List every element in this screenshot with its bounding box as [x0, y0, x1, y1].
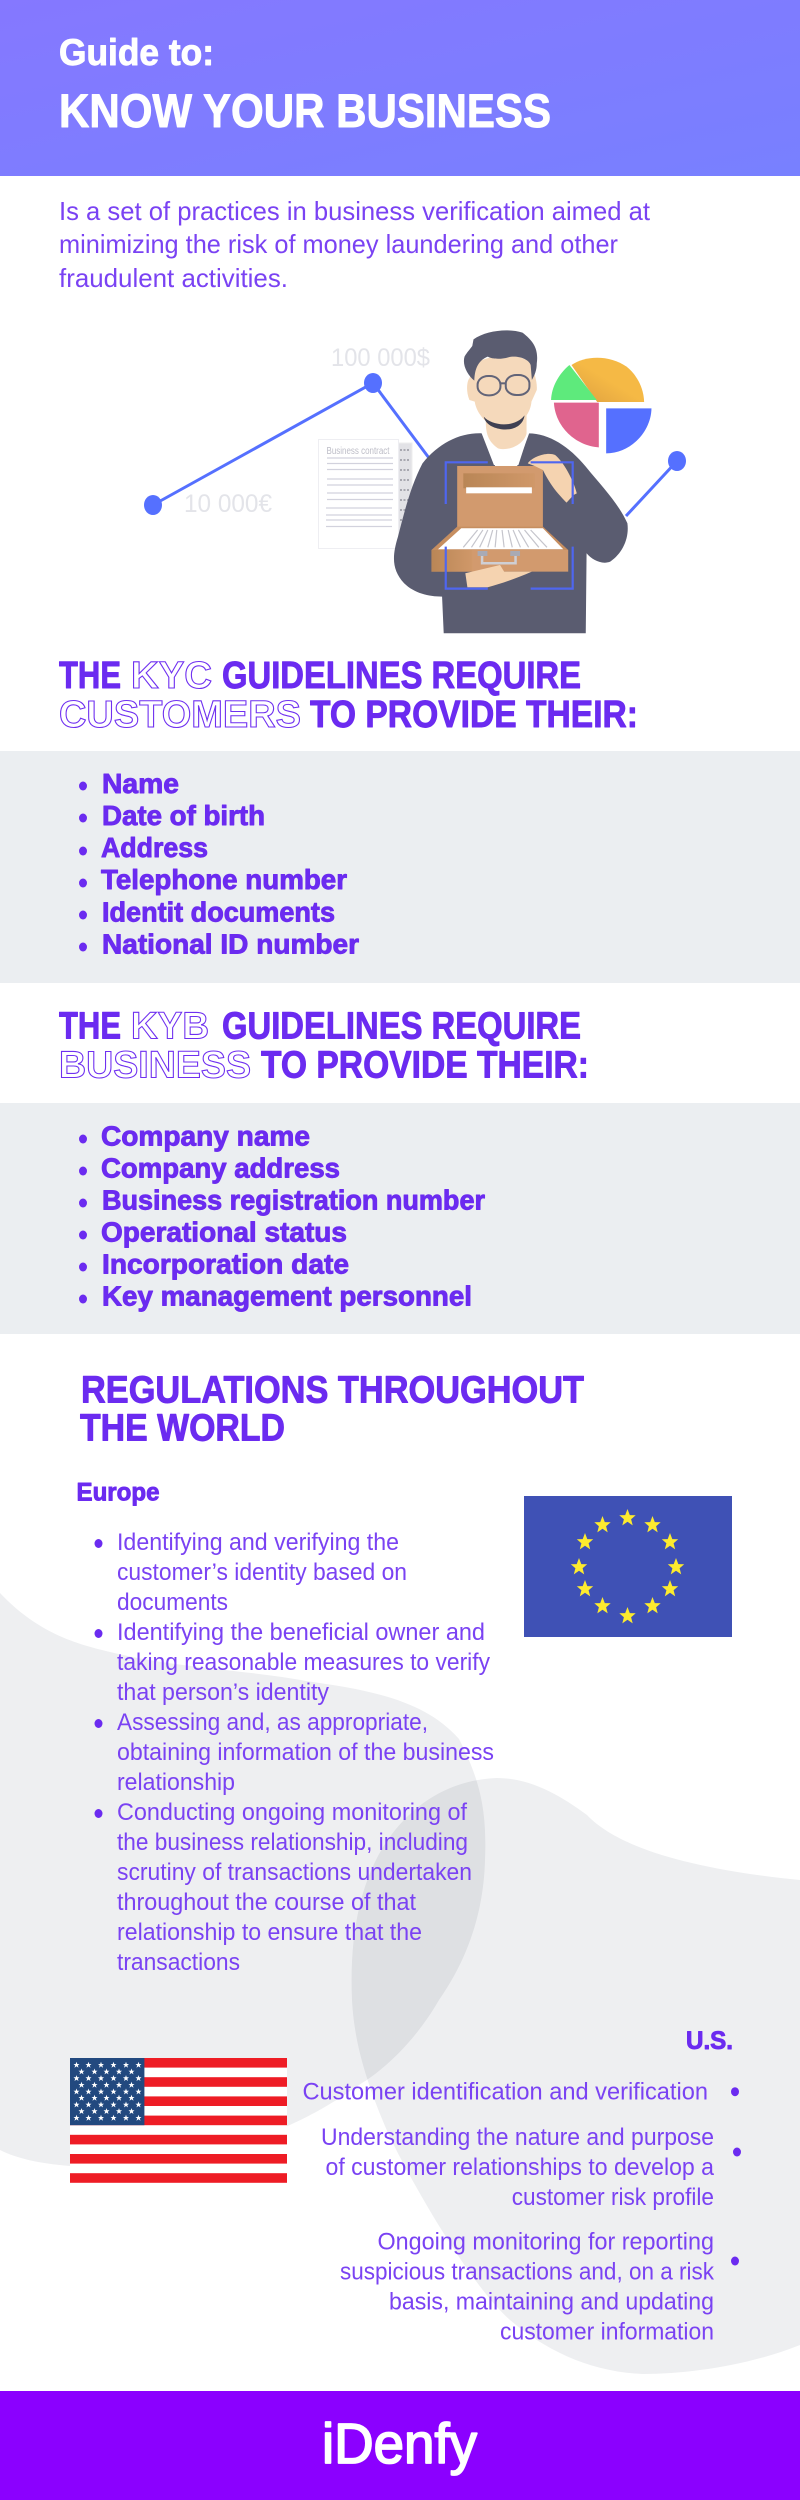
- section heading: U.S.: U.S.: [686, 2027, 733, 2055]
- panel: KYB requirements list: Key management personnel: [102, 1280, 472, 1312]
- list: Europe regulations: documents: [117, 1589, 228, 1616]
- glasses: [478, 375, 529, 395]
- list: Europe regulations: throughout the course of that: [117, 1889, 416, 1916]
- icon: US flag: [70, 2058, 287, 2183]
- heading: regulations throughout the world: [80, 1370, 584, 1450]
- list: Europe regulations: the business relationship, including: [117, 1829, 468, 1856]
- focus brackets: [446, 462, 573, 589]
- panel: KYB requirements list: [0, 1103, 800, 1334]
- heading: KYC guidelines: [59, 655, 638, 736]
- contract document: Business contract: [326, 446, 390, 457]
- panel: KYC requirements list: Address: [101, 832, 208, 863]
- panel: KYC requirements list: Name: [102, 768, 179, 799]
- lower hand: [465, 565, 532, 587]
- list: Europe regulations: Conducting ongoing monitoring of: [117, 1799, 467, 1826]
- panel: KYB requirements list: Company address: [101, 1152, 340, 1184]
- list: Europe regulations: that person’s identity: [117, 1679, 329, 1706]
- list: U.S. regulations: basis, maintaining and updating: [389, 2288, 714, 2315]
- list: Europe regulations: Identifying the beneficial owner and: [117, 1619, 485, 1646]
- panel: KYC requirements list: [0, 751, 800, 983]
- list: Europe regulations: [94, 1529, 494, 1976]
- heading: KYC guidelines: TO PROVIDE THEIR:: [310, 694, 638, 736]
- main title: KNOW YOUR BUSINESS: [59, 84, 551, 137]
- header label: Guide to:: [59, 32, 214, 73]
- heading: KYB guidelines: BUSINESS: [59, 1044, 251, 1086]
- panel: KYB requirements list: Incorporation date: [102, 1248, 349, 1280]
- pie chart: [551, 358, 651, 453]
- intro text: [59, 196, 651, 293]
- list: Europe regulations: Identifying and verifying the: [117, 1529, 399, 1556]
- heading: KYC guidelines: THE: [59, 655, 121, 697]
- list: Europe regulations: obtaining information of the business: [117, 1739, 494, 1766]
- list: Europe regulations: relationship to ensure that the: [117, 1919, 422, 1946]
- intro text: minimizing the risk of money laundering and other: [59, 229, 618, 259]
- panel: KYC requirements list: Identit documents: [102, 896, 335, 928]
- list: Europe regulations: scrutiny of transactions undertaken: [117, 1859, 472, 1886]
- list: Europe regulations: customer’s identity based on: [117, 1559, 407, 1586]
- upper hand: [528, 454, 577, 503]
- list: Europe regulations: Assessing and, as appropriate,: [117, 1709, 428, 1736]
- neck: [486, 413, 527, 449]
- heading: KYB guidelines: KYB: [131, 1006, 209, 1048]
- briefcase: [431, 466, 568, 572]
- heading: regulations throughout the world: THE WORLD: [80, 1408, 285, 1450]
- list: U.S. regulations: customer risk profile: [512, 2184, 714, 2211]
- panel: KYC requirements list: National ID number: [102, 928, 359, 960]
- panel: KYC requirements list: Telephone number: [101, 864, 347, 895]
- panel: KYB requirements list: Operational status: [101, 1216, 347, 1248]
- list: U.S. regulations: Ongoing monitoring for reporting: [378, 2228, 714, 2255]
- panel: KYC requirements list: Date of birth: [102, 800, 265, 831]
- intro text: fraudulent activities.: [59, 263, 288, 293]
- panel: KYB requirements list: Business registration number: [102, 1184, 485, 1216]
- heading: KYB guidelines: TO PROVIDE THEIR:: [261, 1044, 589, 1086]
- beard: [484, 415, 525, 430]
- heading: KYB guidelines: [59, 1006, 589, 1086]
- logo: iDenfy: iDenfy: [322, 2412, 477, 2476]
- list: Europe regulations: relationship: [117, 1769, 235, 1796]
- intro text: Is a set of practices in business verification aimed at: [59, 196, 651, 226]
- contract document: [318, 440, 412, 548]
- footer banner with iDenfy logo: [0, 2391, 800, 2500]
- shirt: [482, 433, 529, 466]
- illustration: business man with briefcase and chart: [144, 330, 686, 633]
- heading: KYC guidelines: CUSTOMERS: [59, 694, 301, 736]
- list: U.S. regulations: Understanding the nature and purpose: [321, 2124, 714, 2151]
- line chart: 100 000$: [331, 344, 430, 372]
- heading: KYC guidelines: KYC: [131, 655, 212, 697]
- sweater: [394, 433, 628, 633]
- list: Europe regulations: taking reasonable measures to verify: [117, 1649, 490, 1676]
- heading: regulations throughout the world: REGULATIONS THROUGHOUT: [81, 1370, 584, 1412]
- list: U.S. regulations: [302, 2078, 741, 2345]
- head: [467, 356, 537, 428]
- panel: KYB requirements list: Company name: [101, 1120, 310, 1152]
- heading: KYB guidelines: THE: [59, 1006, 121, 1048]
- list: U.S. regulations: suspicious transactions and, on a risk: [340, 2258, 715, 2285]
- header banner: [0, 0, 800, 176]
- icon: EU flag: [524, 1496, 732, 1637]
- list: U.S. regulations: customer information: [500, 2318, 714, 2345]
- list: U.S. regulations: Customer identification and verification: [302, 2078, 708, 2105]
- heading: KYC guidelines: GUIDELINES REQUIRE: [222, 655, 581, 697]
- line chart: 10 000€: [184, 490, 272, 518]
- list: Europe regulations: transactions: [117, 1949, 240, 1976]
- section heading: Europe: Europe: [76, 1478, 160, 1506]
- list: U.S. regulations: of customer relationships to develop a: [326, 2154, 715, 2181]
- background blob: left: [0, 1593, 485, 2168]
- heading: KYB guidelines: GUIDELINES REQUIRE: [222, 1006, 581, 1048]
- background blob: right: [352, 1778, 800, 2374]
- line chart: [144, 344, 686, 518]
- hair: [464, 330, 537, 381]
